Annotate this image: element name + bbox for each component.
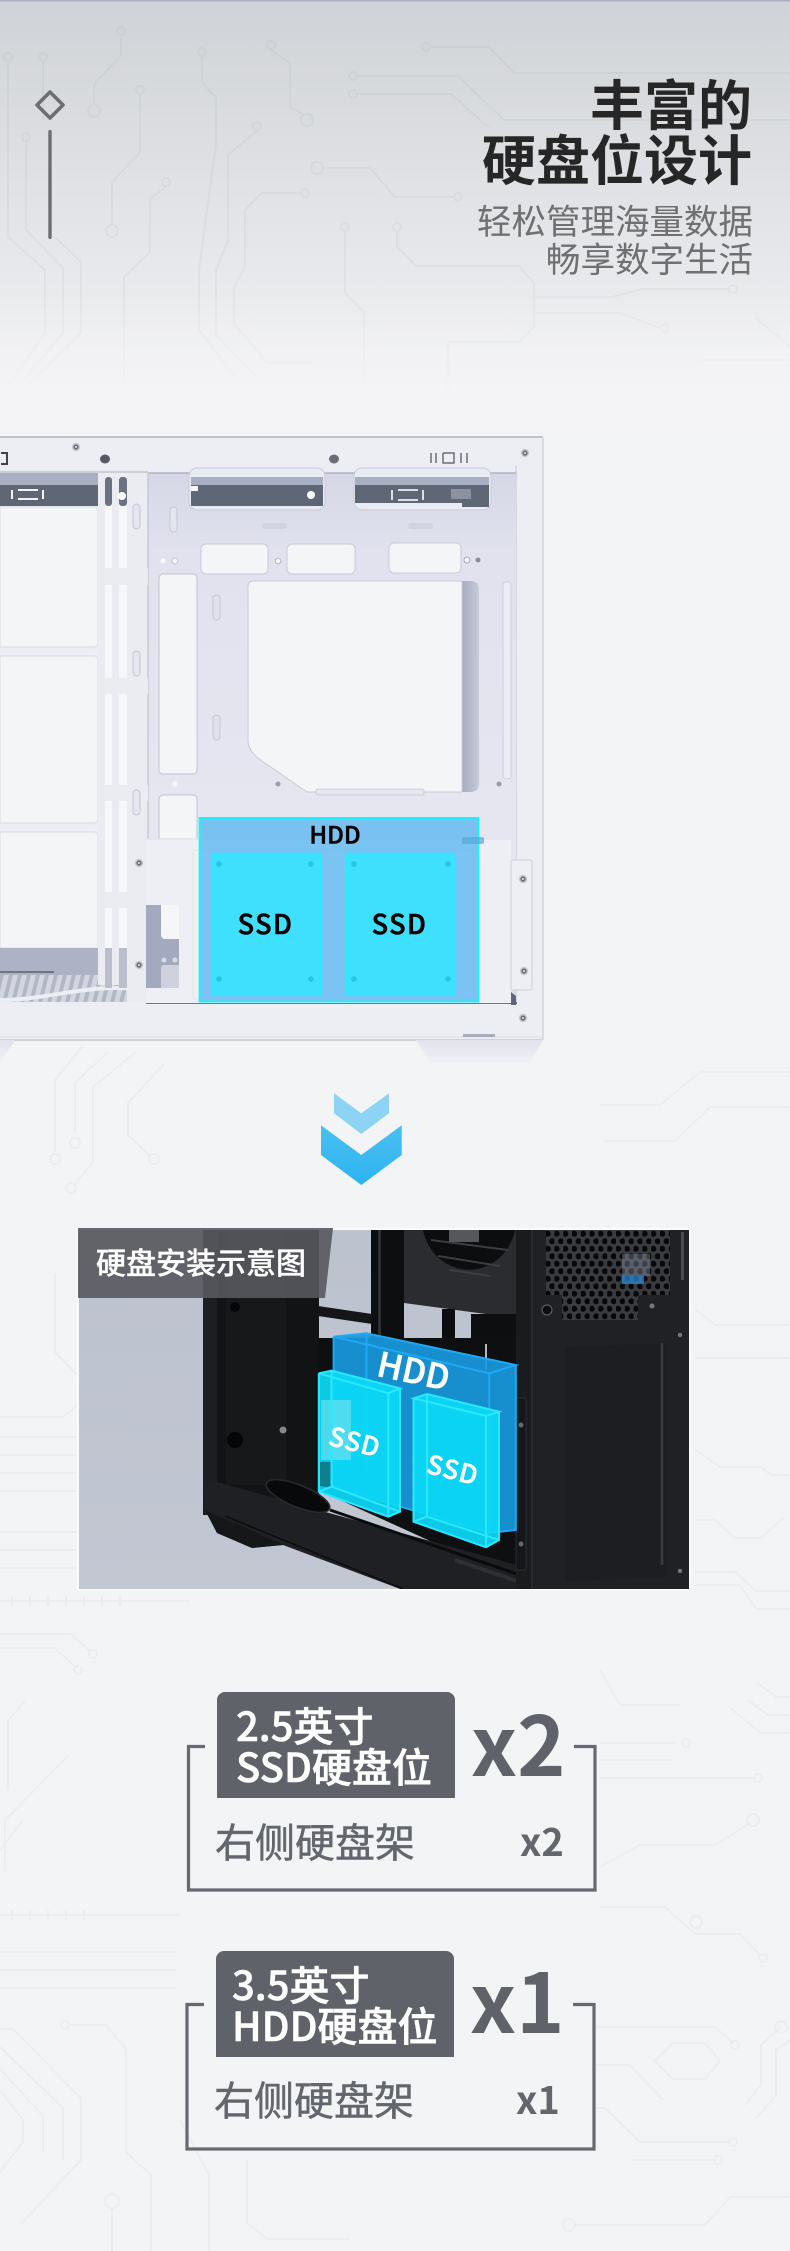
photo panel: black case installation diagram	[77, 1228, 691, 1591]
tray row: 右侧硬盘架	[214, 2069, 414, 2127]
3D HDD box	[334, 1333, 516, 1533]
black case right panel	[516, 1230, 690, 1590]
tray row	[214, 2069, 560, 2127]
bracket frame	[188, 1746, 595, 1890]
arrow: double chevron down	[321, 1093, 402, 1185]
SSD highlight right: SSD	[372, 903, 427, 942]
dark heading label	[216, 1951, 454, 2057]
left window openings	[0, 473, 148, 1003]
spec block: 3.5 inch HDD	[187, 1938, 594, 2149]
photo caption tag: 硬盘安装示意图	[96, 1239, 306, 1283]
3D SSD box right: SSD	[423, 1445, 483, 1493]
dark heading label: SSD硬盘位	[236, 1736, 432, 1794]
tray row	[215, 1811, 564, 1869]
dark heading label	[217, 1692, 455, 1798]
photo caption tag	[78, 1228, 333, 1298]
black case left wall	[203, 1230, 319, 1515]
SSD highlight left	[212, 854, 321, 994]
subtitle: 轻松管理海量数据	[477, 194, 753, 244]
HDD highlight	[200, 816, 484, 1002]
subtitle: 畅享数字生活	[546, 232, 753, 282]
dark heading label: 2.5英寸	[236, 1695, 374, 1753]
top slots and holes	[160, 468, 491, 574]
tray row: 右侧硬盘架	[215, 1811, 415, 1869]
drive tray	[146, 839, 532, 1005]
white PC case side view	[0, 437, 543, 1063]
3D SSD box left: SSD	[325, 1417, 385, 1465]
case frame	[0, 437, 543, 1063]
large count: x1	[470, 1938, 564, 2057]
tray row: x1	[516, 2070, 560, 2125]
black case base and foot	[203, 1473, 517, 1590]
title: 硬盘位设计	[482, 117, 752, 196]
SSD highlight right	[346, 854, 455, 994]
HDD highlight: HDD	[309, 816, 361, 850]
screws	[1, 443, 529, 1022]
large count: x2	[471, 1681, 565, 1800]
spec block: 2.5 inch SSD	[188, 1681, 595, 1890]
tray row: x2	[520, 1812, 564, 1867]
dark heading label: 3.5英寸	[232, 1954, 370, 2012]
SSD highlight left: SSD	[238, 903, 293, 942]
title	[482, 62, 752, 196]
motherboard tray cutouts	[159, 574, 511, 839]
bracket frame	[187, 2004, 594, 2149]
3D SSD box right	[414, 1394, 499, 1547]
dark heading label: HDD硬盘位	[232, 1995, 438, 2053]
rear bars and plate	[318, 1230, 516, 1580]
3D SSD box left	[319, 1371, 400, 1517]
subtitle	[477, 194, 753, 282]
icon: diamond with vertical line	[37, 92, 63, 239]
title: 丰富的	[590, 62, 752, 141]
3D HDD box: HDD	[373, 1337, 455, 1400]
